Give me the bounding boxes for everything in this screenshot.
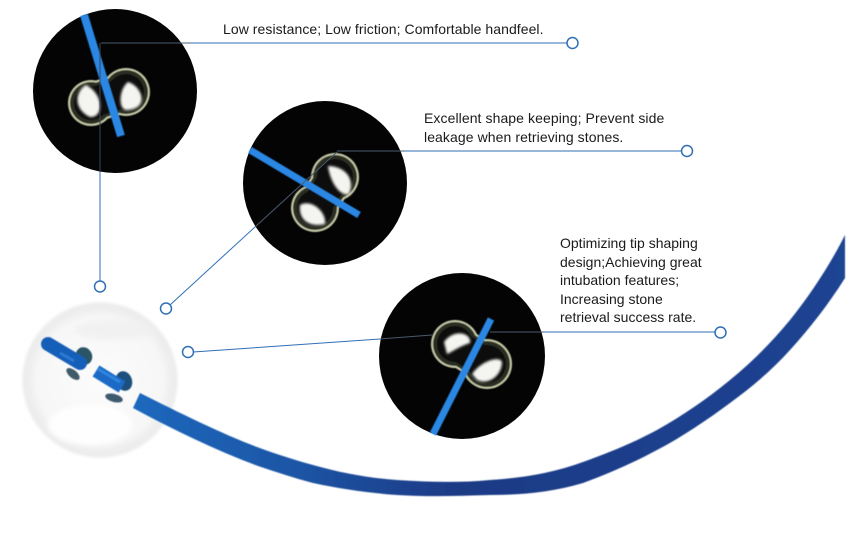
leader line 3 right: [490, 327, 726, 338]
catheter tip: [48, 344, 135, 404]
text: tip shaping: [560, 235, 702, 325]
text: tip shaping: intubation features;: [560, 272, 679, 288]
leader line 2 right: [337, 146, 692, 156]
leader line 2 diagonal: [160, 152, 337, 314]
text: tip shaping: retrieval success rate.: [560, 309, 696, 325]
text: shape keeping: leakage when retrieving stones.: [424, 129, 623, 145]
image circle 1: [33, 9, 197, 173]
text: shape keeping: [424, 110, 664, 145]
text: shape keeping: Excellent shape keeping; Prevent side: [424, 110, 664, 126]
leader line 1 vertical: [94, 43, 106, 292]
leader line 3 left: [182, 335, 432, 358]
text: tip shaping: Increasing stone: [560, 290, 663, 306]
text: tip shaping: design;Achieving great: [560, 254, 702, 270]
text: tip shaping: Optimizing tip shaping: [560, 235, 698, 251]
catheter tube: [133, 235, 845, 496]
image circle 3: [379, 273, 545, 439]
text: low resistance: Low resistance; Low friction; Comfortable handfeel.: [223, 21, 544, 37]
balloon at catheter tip: [22, 302, 178, 458]
image circle 2: [243, 101, 407, 265]
leader line 1 horizontal: [101, 38, 578, 48]
